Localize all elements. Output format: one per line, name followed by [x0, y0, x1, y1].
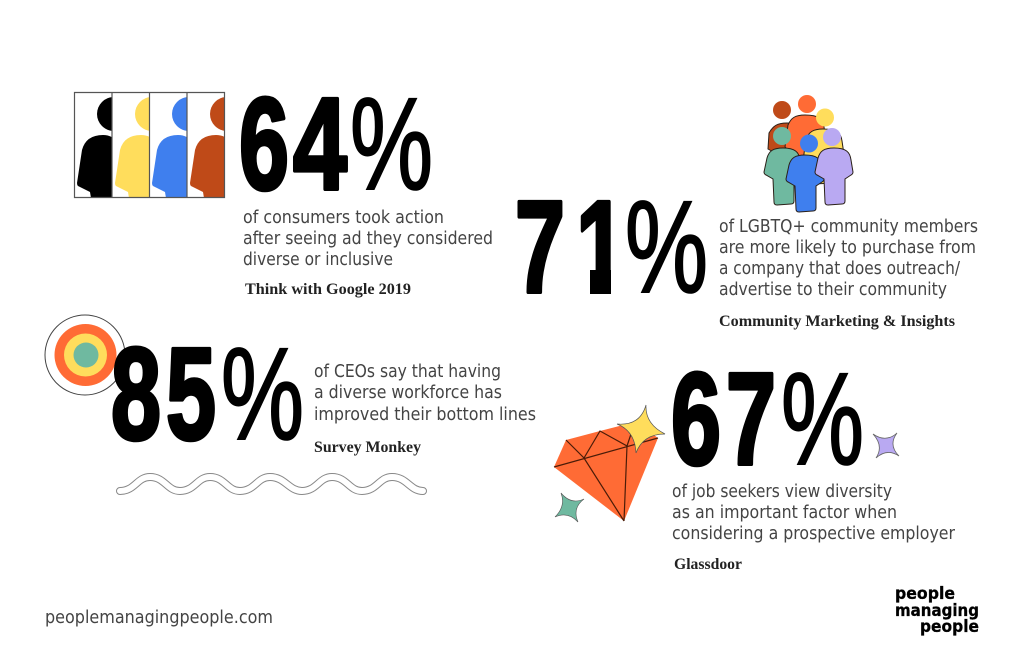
stat: 64%: 6	[239, 70, 289, 217]
source: Glassdoor: Glassdoor	[674, 556, 742, 573]
stat: 67%: 7	[726, 345, 776, 492]
stat: 85%: 8	[111, 320, 161, 467]
text block: 67% description: of job seekers view diversity	[672, 482, 892, 502]
text block: 64% description: of consumers took action	[243, 208, 444, 228]
icon: group of people	[764, 95, 853, 212]
icon: four person silhouettes panel	[74, 92, 244, 198]
text block: 67% description	[672, 482, 956, 544]
decoration: wavy line	[120, 477, 423, 491]
text block: 67% description: considering a prospective employer	[672, 524, 956, 544]
text block: 85% description	[314, 362, 536, 425]
text block: 64% description: after seeing ad they considered	[243, 229, 493, 249]
logo: people managing people: people	[920, 617, 979, 636]
icon: target circles	[45, 315, 125, 395]
stat: 71%	[515, 173, 708, 320]
stat: 71%: 7	[515, 173, 565, 320]
icon: lilac sparkle	[873, 433, 899, 458]
stat: 85%	[111, 320, 304, 467]
stat: 67%: 6	[671, 345, 721, 492]
stat: 67%: %	[781, 345, 864, 492]
text block: 71% description: a company that does outreach/	[719, 259, 960, 279]
stat: 67%	[671, 345, 864, 492]
stat: 71%: %	[625, 173, 708, 320]
stat: 85%: 5	[166, 320, 216, 467]
stat: 71%: 1	[576, 173, 626, 320]
source: Think with Google: Think with Google 2019	[245, 281, 411, 298]
text block: 85% description: improved their bottom lines	[314, 405, 536, 425]
logo: people managing people: people	[895, 584, 955, 603]
text block: 71% description: are more likely to purchase from	[719, 238, 976, 258]
logo: people managing people: managing	[895, 601, 979, 620]
stat: 64%	[239, 70, 433, 217]
logo: people managing people	[895, 584, 979, 636]
text block: 85% description: a diverse workforce has	[314, 383, 502, 403]
text block: 64% description: diverse or inclusive	[243, 250, 393, 270]
text block: 85% description: of CEOs say that having	[314, 362, 501, 382]
text block: 71% description: of LGBTQ+ community members	[719, 217, 978, 237]
stat: 85%: %	[221, 320, 304, 467]
source: Community Marketing & Insights: Community Marketing & Insights	[719, 313, 955, 330]
text block: 67% description: as an important factor when	[672, 503, 897, 523]
text block: 71% description: advertise to their community	[719, 280, 947, 300]
stat: 64%: %	[350, 70, 433, 217]
source: Survey Monkey: Survey Monkey	[314, 439, 421, 456]
text block: 64% description	[243, 208, 493, 270]
icon: diamond with sparkles	[554, 405, 665, 522]
stat: 64%: 4	[293, 70, 347, 217]
footer url: peoplemanagingpeople.com	[45, 608, 273, 628]
text block: 71% description	[719, 217, 978, 300]
